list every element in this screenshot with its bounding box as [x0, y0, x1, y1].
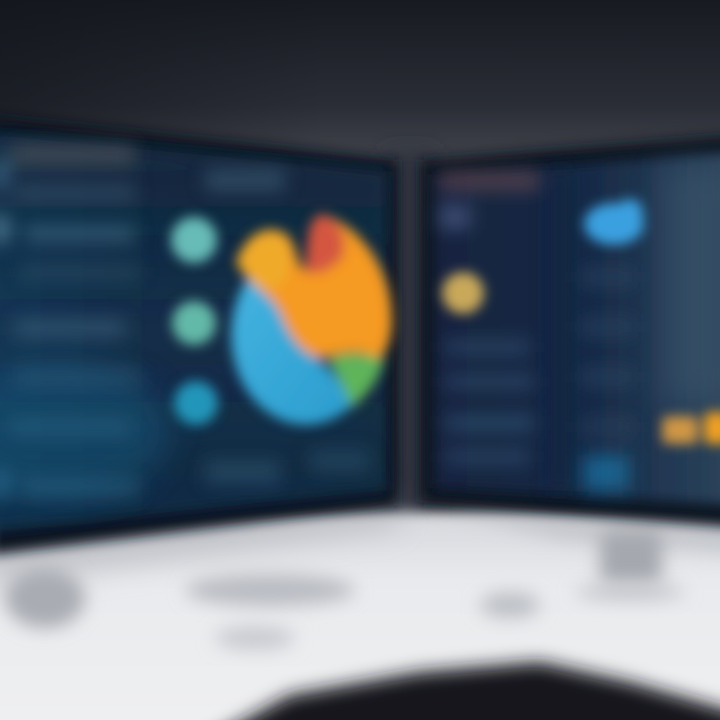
- small desk object: [480, 592, 540, 618]
- desk: [0, 500, 720, 720]
- vertical divider band: [548, 170, 570, 490]
- wall background: [0, 0, 720, 300]
- pie slice: green: [328, 353, 384, 408]
- left monitor circular icons: [171, 217, 218, 425]
- darker wall shading toward the left: [0, 0, 720, 160]
- left monitor frame: [0, 116, 398, 555]
- left monitor stand: [5, 568, 85, 628]
- icon: blue cloud: [584, 199, 644, 245]
- right monitor screen: [434, 152, 720, 505]
- left monitor screen: [0, 135, 386, 530]
- pie slice: orange: [236, 214, 392, 360]
- left column text bars: [0, 145, 370, 498]
- dark foreground shape: [200, 662, 720, 720]
- orange bar indicators: [662, 412, 720, 444]
- pie chart: [231, 214, 392, 425]
- pie slice: red: [305, 214, 344, 273]
- pie slice: yellow: [236, 231, 290, 288]
- pie slice: blue: [231, 268, 356, 425]
- right monitor stand: [600, 530, 662, 585]
- panel: right monitor: [420, 135, 720, 528]
- right column light block: [660, 165, 720, 405]
- lower left teal glow: [0, 360, 170, 500]
- desk shadow under left monitor: [0, 500, 400, 585]
- gap between the monitors: [385, 150, 435, 520]
- desk shadow under right monitor: [430, 505, 720, 555]
- right monitor frame: [420, 135, 720, 528]
- center monitor stand: [185, 574, 355, 606]
- icon: yellow circle: [442, 272, 484, 314]
- right monitor text bars: [440, 172, 635, 491]
- left screen shading: [0, 135, 386, 530]
- panel: left monitor: [0, 116, 398, 555]
